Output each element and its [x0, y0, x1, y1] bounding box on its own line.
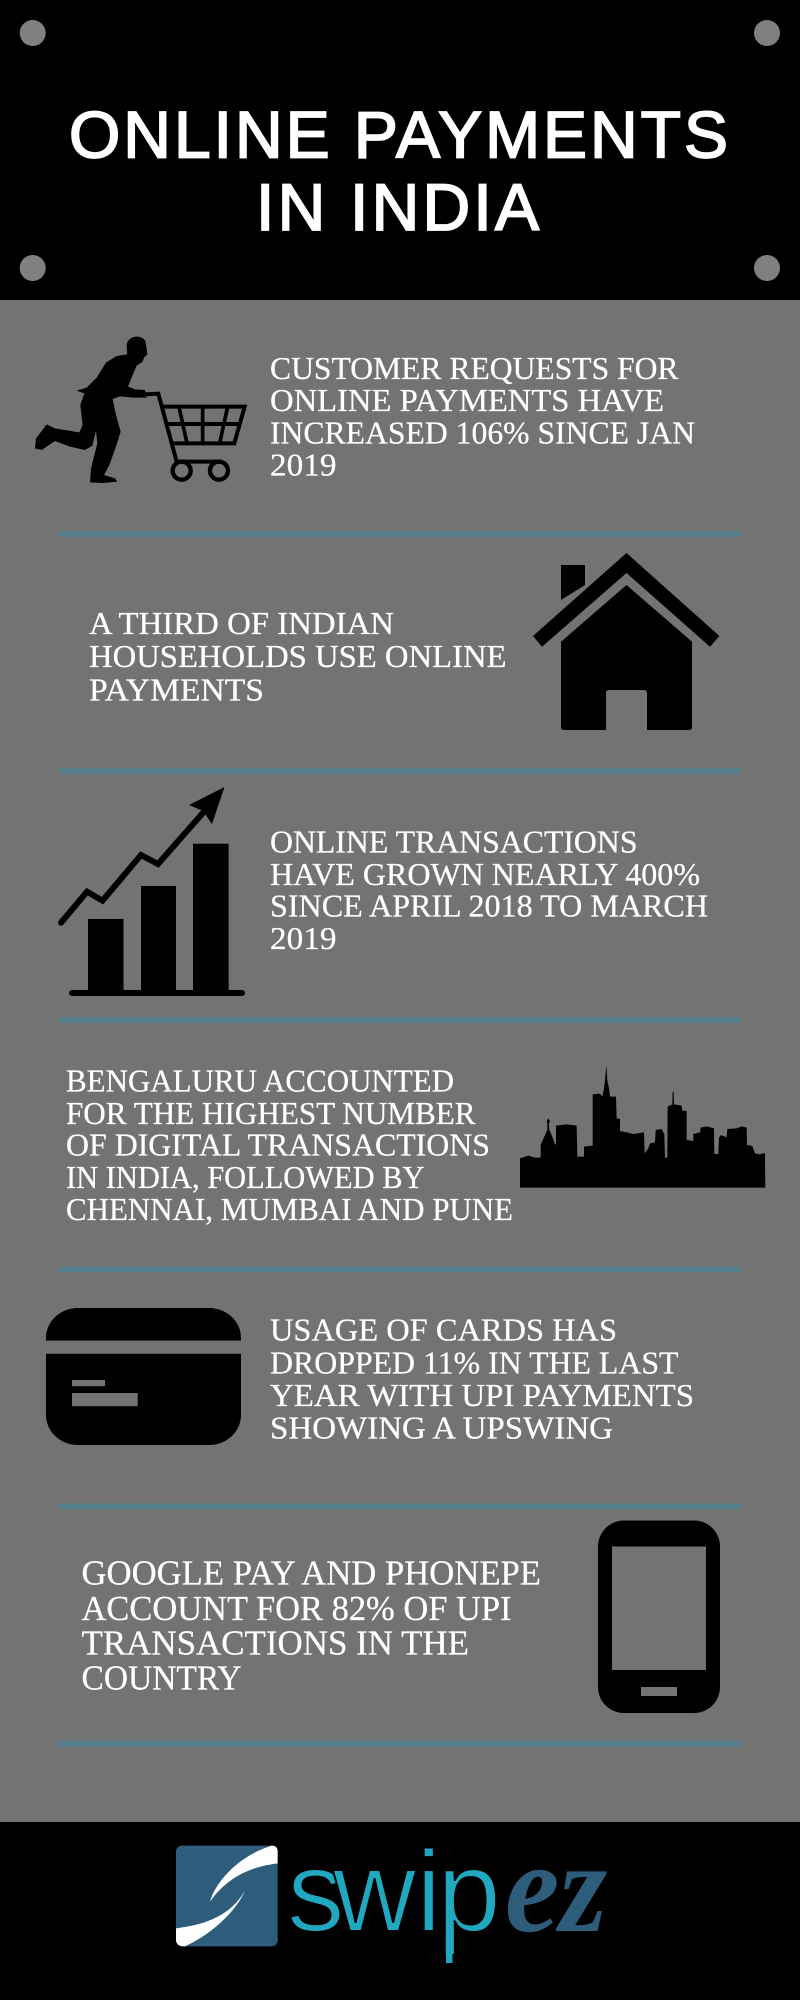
- panel: Google Pay and PhonePe: [82, 1520, 720, 1713]
- icon: smartphone: [598, 1520, 720, 1713]
- icon: house: [533, 553, 719, 730]
- title: IN INDIA: [256, 170, 539, 244]
- panel: Bengaluru: [66, 1062, 765, 1227]
- text block: Google Pay and PhonePe: TRANSACTIONS IN THE: [82, 1624, 469, 1663]
- logo mark: [176, 1846, 278, 1946]
- text block: Google Pay and PhonePe: [82, 1554, 541, 1698]
- text block: online transactions: ONLINE TRANSACTIONS: [270, 824, 638, 860]
- icon: city skyline: [520, 1065, 765, 1188]
- logo wordmark: ez: [505, 1816, 607, 1960]
- text block: households: PAYMENTS: [89, 672, 264, 708]
- logo: swipez: [176, 1816, 607, 1963]
- text block: card usage: [270, 1312, 694, 1446]
- panel: households: [89, 553, 719, 730]
- text block: card usage: SHOWING A UPSWING: [270, 1410, 613, 1446]
- text block: Google Pay and PhonePe: COUNTRY: [82, 1658, 242, 1698]
- panel: card usage: [46, 1308, 694, 1446]
- text block: card usage: YEAR WITH UPI PAYMENTS: [270, 1377, 694, 1413]
- text block: online transactions: 2019: [270, 920, 336, 956]
- text block: Bengaluru: CHENNAI, MUMBAI AND PUNE: [66, 1191, 513, 1227]
- text block: online transactions: HAVE GROWN NEARLY 400%: [270, 856, 700, 892]
- text block: Bengaluru: BENGALURU ACCOUNTED: [66, 1062, 454, 1098]
- text block: customer requests: CUSTOMER REQUESTS FOR: [270, 350, 679, 386]
- footer band: [0, 1816, 800, 2000]
- icon: rising bar chart with arrow: [61, 787, 245, 996]
- text block: Bengaluru: FOR THE HIGHEST NUMBER: [66, 1095, 476, 1131]
- title: [69, 98, 728, 244]
- text block: Bengaluru: OF DIGITAL TRANSACTIONS: [66, 1126, 490, 1162]
- text block: customer requests: [270, 350, 695, 482]
- text block: customer requests: INCREASED 106% SINCE JAN: [270, 414, 695, 450]
- text block: card usage: USAGE OF CARDS HAS: [270, 1312, 617, 1348]
- icon: person pushing shopping cart: [35, 337, 245, 483]
- text block: Bengaluru: [66, 1062, 513, 1227]
- text block: customer requests: ONLINE PAYMENTS HAVE: [270, 382, 664, 418]
- text block: Bengaluru: IN INDIA, FOLLOWED BY: [66, 1159, 424, 1195]
- text block: customer requests: 2019: [270, 446, 336, 482]
- text block: online transactions: [270, 824, 708, 956]
- header band: [0, 0, 800, 300]
- text block: households: [89, 605, 506, 708]
- icon: credit card: [46, 1308, 241, 1445]
- title: ONLINE PAYMENTS: [69, 98, 728, 172]
- panel: customer requests: [35, 337, 695, 483]
- logo wordmark: [287, 1816, 607, 1963]
- text block: Google Pay and PhonePe: ACCOUNT FOR 82% OF UPI: [82, 1589, 512, 1628]
- text block: households: HOUSEHOLDS USE ONLINE: [89, 638, 506, 674]
- logo wordmark: swip: [287, 1828, 501, 1956]
- corner rivets: [20, 20, 780, 281]
- text block: Google Pay and PhonePe: GOOGLE PAY AND PHONEPE: [82, 1554, 541, 1593]
- text block: card usage: DROPPED 11% IN THE LAST: [270, 1344, 679, 1380]
- panel: online transactions: [61, 787, 708, 996]
- text block: households: A THIRD OF INDIAN: [89, 605, 394, 641]
- text block: online transactions: SINCE APRIL 2018 TO MARCH: [270, 888, 708, 924]
